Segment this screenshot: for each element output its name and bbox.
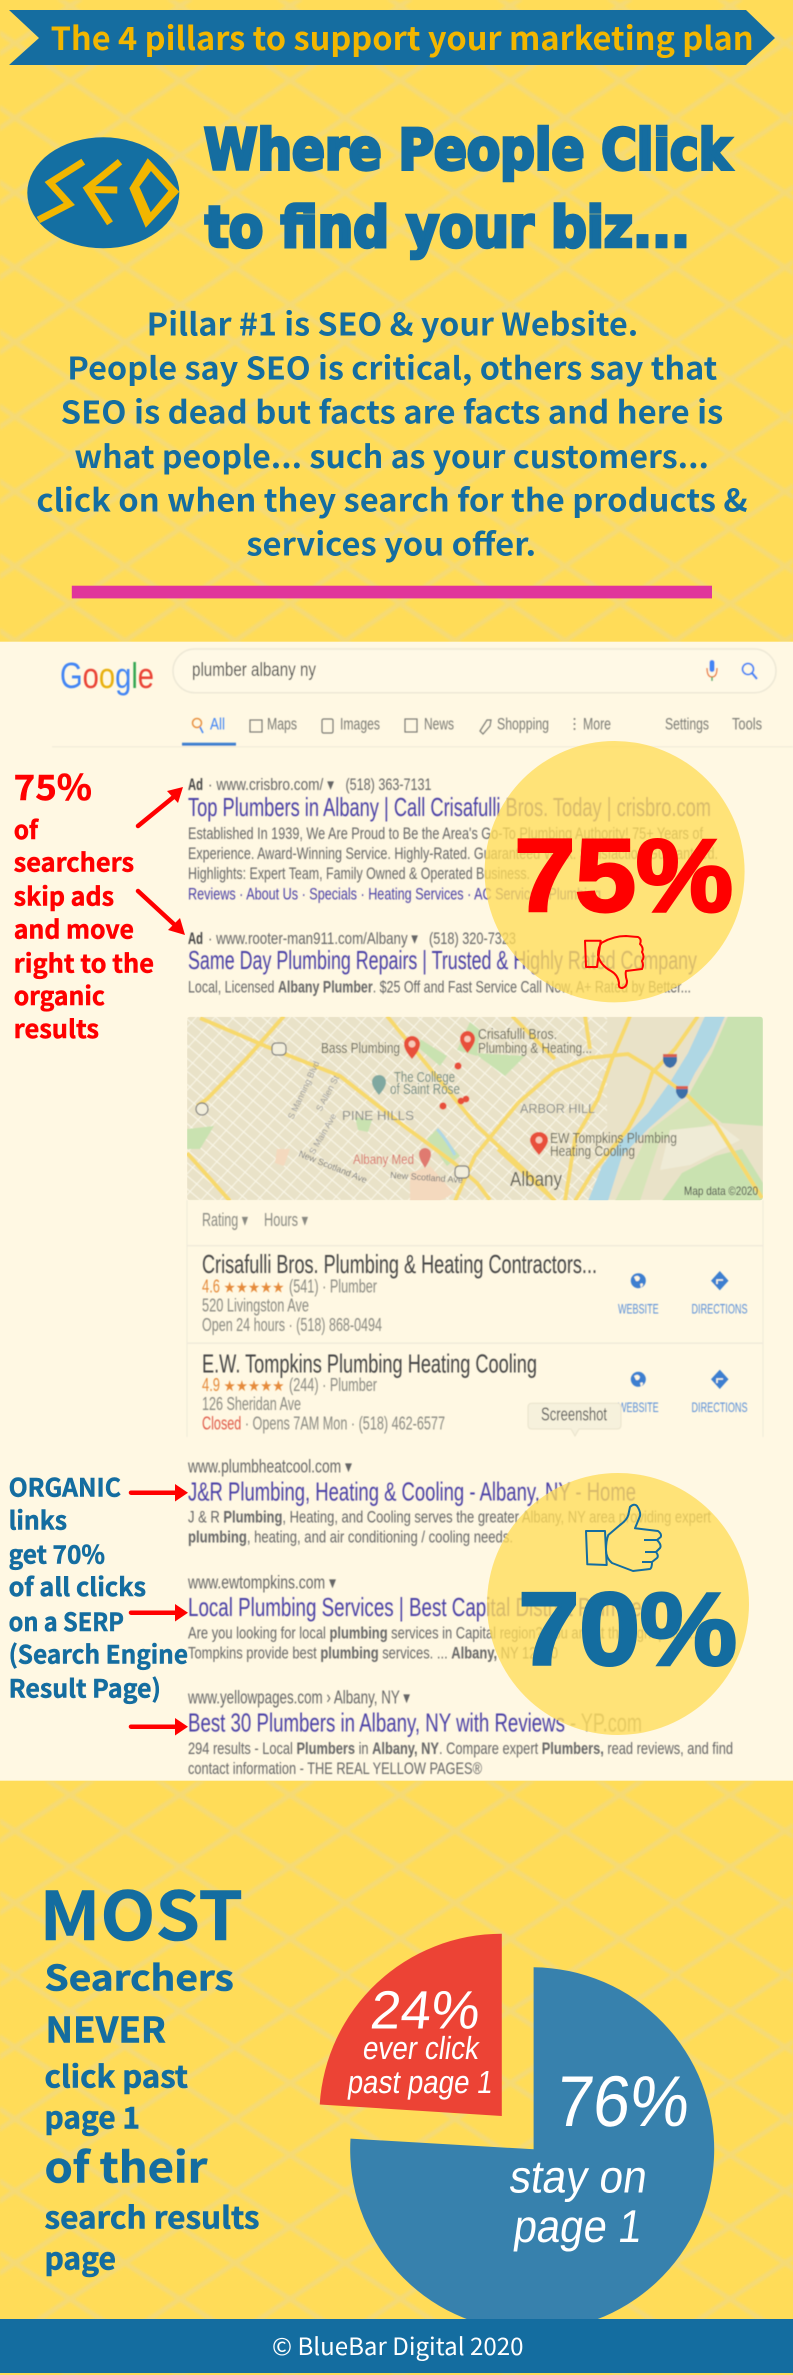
map labels: Albany <box>510 1169 562 1191</box>
map labels: S Allen St <box>314 1073 341 1113</box>
pink divider bar <box>72 586 712 598</box>
search tabs: Tools <box>732 714 762 733</box>
local listings card: Hours ▾ <box>264 1210 308 1230</box>
callout: organic links get 70 percent: (Search Engine <box>9 1635 188 1671</box>
callout: 75 percent of searchers skip ads: 75% <box>14 760 92 811</box>
map labels <box>286 1026 758 1198</box>
text block: most searchers never click past page 1: Searchers <box>44 1951 234 2002</box>
callout: 75 percent of searchers skip ads: skip ads <box>14 878 114 914</box>
listing 2: 126 Sheridan Ave <box>202 1394 301 1414</box>
ad result 2: Ad <box>188 929 203 948</box>
icon: thumbs down <box>585 936 644 988</box>
icon: SEO logo <box>27 137 179 248</box>
intro paragraph: services you offer. <box>246 520 536 564</box>
heading: to find your biz... <box>205 196 690 260</box>
organic results: Tompkins provide best plumbing services. ... Albany, NY 12210 <box>188 1643 558 1662</box>
text block: most searchers never click past page 1: page 1 <box>44 2093 140 2137</box>
local listings card: Rating ▾ <box>202 1210 248 1230</box>
panel: search results screenshot <box>0 642 793 1781</box>
map labels: The College <box>394 1069 455 1086</box>
local listings card <box>187 1200 763 1437</box>
ad result 2: · www.rooter-man911.com/Albany ▾ <box>208 929 418 948</box>
callout: 75 percent circle <box>485 741 745 1002</box>
ad result 2: Local, Licensed Albany Plumber. $25 Off and Fast Service Call Now, A+ Rated by Better... <box>188 978 691 997</box>
map labels: S Main Ave <box>307 1112 338 1156</box>
pie slice: 24 percent: 24% <box>368 1981 483 2041</box>
callout: 75 percent of searchers skip ads: organic <box>14 977 105 1013</box>
arrow: to organic result 3 <box>131 1718 188 1736</box>
callout: organic links get 70 percent: of all clicks <box>9 1568 146 1604</box>
arrow: down to second ad <box>138 891 185 935</box>
text block: most searchers never click past page 1: search results <box>44 2194 260 2238</box>
listing 1: (541) · Plumber <box>289 1277 377 1297</box>
pie slice: 76 percent: stay on <box>507 2151 651 2202</box>
organic results: 294 results - Local Plumbers in Albany, NY. Compare expert Plumbers, read reviews, and find <box>188 1739 733 1758</box>
pie slice: 76 percent: 76% <box>552 2062 694 2142</box>
organic results: - YP.com <box>570 1708 642 1738</box>
organic results: www.plumbheatcool.com ▾ <box>187 1457 352 1477</box>
listing 2: 4.9 <box>202 1375 220 1395</box>
listing 1: DIRECTIONS <box>692 1300 748 1316</box>
organic results: plumbing, heating, and air conditioning / cooling needs. <box>188 1528 513 1547</box>
intro paragraph: Pillar #1 is SEO & your Website. <box>147 300 638 344</box>
screenshot tooltip <box>528 1403 621 1436</box>
heading <box>204 118 733 260</box>
intro paragraph: click on when they search for the products & <box>36 475 748 520</box>
map labels: Plumbing & Heating... <box>478 1040 592 1057</box>
map labels: New Scotland Ave <box>390 1170 463 1185</box>
arrow: to organic result 1 <box>131 1484 188 1502</box>
callout: 75 percent of searchers skip ads: searchers <box>14 844 134 880</box>
map labels: New Scotland Ave <box>297 1149 369 1185</box>
ad result 1: Highlights: Expert Team, Family Owned & Operated Business. <box>188 864 530 883</box>
map labels: Heating Cooling <box>550 1143 635 1160</box>
ad result 2: (518) 320-7323 <box>429 929 516 948</box>
map pins <box>372 1031 548 1168</box>
intro paragraph: People say SEO is critical, others say that <box>67 344 717 389</box>
organic results: contact information - THE REAL YELLOW PAGES® <box>188 1759 482 1778</box>
organic results: Best 30 Plumbers in Albany, NY with Reviews <box>188 1708 565 1738</box>
listing 1: WEBSITE <box>618 1300 659 1316</box>
pie slice: 24 percent: past page 1 <box>346 2064 496 2100</box>
map labels: PINE HILLS <box>342 1108 414 1123</box>
intro paragraph: SEO is dead but facts are facts and here is <box>61 387 723 432</box>
screenshot tooltip: Screenshot <box>541 1405 607 1425</box>
search tabs: All <box>210 714 225 733</box>
road shields <box>196 1043 688 1178</box>
text block: most searchers never click past page 1: page <box>44 2235 116 2279</box>
callout: organic links get 70 percent: get 70% <box>9 1535 105 1571</box>
callout: organic links get 70 percent: ORGANIC <box>9 1469 121 1505</box>
organic results: www.ewtompkins.com ▾ <box>187 1572 336 1592</box>
callout: 75 percent of searchers skip ads: right to the <box>14 945 154 981</box>
listing 1: 4.6 <box>202 1277 220 1297</box>
callout: organic links get 70 percent: Result Page) <box>9 1670 161 1706</box>
pie slice: 76 percent: page 1 <box>511 2200 646 2252</box>
listing 1: Crisafulli Bros. Plumbing & Heating Contractors... <box>202 1249 597 1279</box>
search tabs: More <box>583 714 611 733</box>
callout: 75 percent of searchers skip ads: of <box>14 811 40 847</box>
search tabs: Shopping <box>497 714 549 733</box>
listing 2: Closed · Opens 7AM Mon · (518) 462-6577 <box>202 1413 445 1433</box>
map labels: Bass Plumbing <box>321 1040 400 1057</box>
organic results: Are you looking for local plumbing services in Capital region? You are at the right place... <box>188 1623 700 1642</box>
map labels: of Saint Rose <box>390 1081 460 1098</box>
intro paragraph: what people... such as your customers... <box>74 432 709 477</box>
map labels: ARBOR HILL <box>520 1101 595 1116</box>
map labels: EW Tompkins Plumbing <box>550 1130 677 1147</box>
callout: 75 percent circle: 75% <box>514 818 733 933</box>
search tabs <box>52 714 793 747</box>
callout: 75 percent of searchers skip ads <box>14 760 154 1046</box>
callout: organic links get 70 percent: links <box>9 1501 67 1537</box>
callout: 75 percent of searchers skip ads: and move <box>14 910 134 946</box>
search tabs: News <box>424 714 454 733</box>
search box <box>173 649 776 693</box>
search box: plumber albany ny <box>192 660 316 681</box>
text block: most searchers never click past page 1: of their <box>44 2134 208 2195</box>
listing 2: DIRECTIONS <box>692 1399 748 1415</box>
pie slice: 76 percent <box>350 1967 714 2331</box>
pie chart <box>320 1934 714 2331</box>
map labels: S Manning Blvd <box>286 1059 321 1121</box>
callout: 70 percent circle <box>487 1473 749 1735</box>
pie slice: 24 percent <box>320 1934 502 2116</box>
callout: 70 percent circle: 70% <box>518 1572 737 1687</box>
text block: most searchers never click past page 1: MOST <box>40 1863 243 1960</box>
map labels: Map data ©2020 <box>684 1184 758 1198</box>
pie slice: 24 percent: ever click <box>361 2030 483 2066</box>
ad result 2 <box>188 929 697 997</box>
text block: most searchers never click past page 1: NEVER <box>46 2003 166 2054</box>
ad result 1: (518) 363-7131 <box>346 775 432 794</box>
Google logo: Google <box>60 655 154 696</box>
intro paragraph <box>36 300 748 564</box>
search tabs: Maps <box>267 714 297 733</box>
callout: 75 percent of searchers skip ads: results <box>14 1010 99 1046</box>
organic results: www.yellowpages.com › Albany, NY ▾ <box>187 1687 410 1707</box>
ad result 1 <box>188 775 718 903</box>
organic results <box>187 1457 733 1778</box>
ad result 1: Ad <box>188 775 203 794</box>
map labels: Crisafulli Bros. <box>478 1026 557 1043</box>
ad result 1: Reviews · About Us · Specials · Heating Services · AC Service · Plumbing <box>188 884 601 903</box>
search tabs: Settings <box>665 714 709 733</box>
icon: thumbs up <box>586 1505 661 1571</box>
listing 1 <box>202 1249 748 1335</box>
listing 1: ★★★★★ <box>224 1280 284 1297</box>
listing 2: E.W. Tompkins Plumbing Heating Cooling <box>202 1348 537 1378</box>
arrow: to organic result 2 <box>131 1604 188 1622</box>
footer <box>0 2319 793 2373</box>
text block: most searchers never click past page 1: click past <box>44 2052 188 2096</box>
listing 2: (244) · Plumber <box>289 1375 377 1395</box>
callout: organic links get 70 percent <box>9 1469 188 1706</box>
text block: most searchers never click past page 1 <box>40 1863 260 2279</box>
listing 2: ★★★★★ <box>224 1378 284 1395</box>
title banner: The 4 pillars to support your marketing plan <box>51 14 754 60</box>
listing 2: WEBSITE <box>618 1399 659 1415</box>
listing 1: Open 24 hours · (518) 868-0494 <box>202 1315 382 1335</box>
search tabs: Images <box>340 714 380 733</box>
listing 2 <box>202 1348 748 1433</box>
listing 1: 520 Livingston Ave <box>202 1296 309 1316</box>
arrow: up to first ad <box>138 787 183 826</box>
map labels: Albany Med <box>353 1151 414 1167</box>
map <box>187 1016 763 1201</box>
ad result 1: · www.crisbro.com/ ▾ <box>208 775 334 794</box>
callout: organic links get 70 percent: on a SERP <box>9 1603 124 1639</box>
footer: © BlueBar Digital 2020 <box>272 2327 524 2362</box>
